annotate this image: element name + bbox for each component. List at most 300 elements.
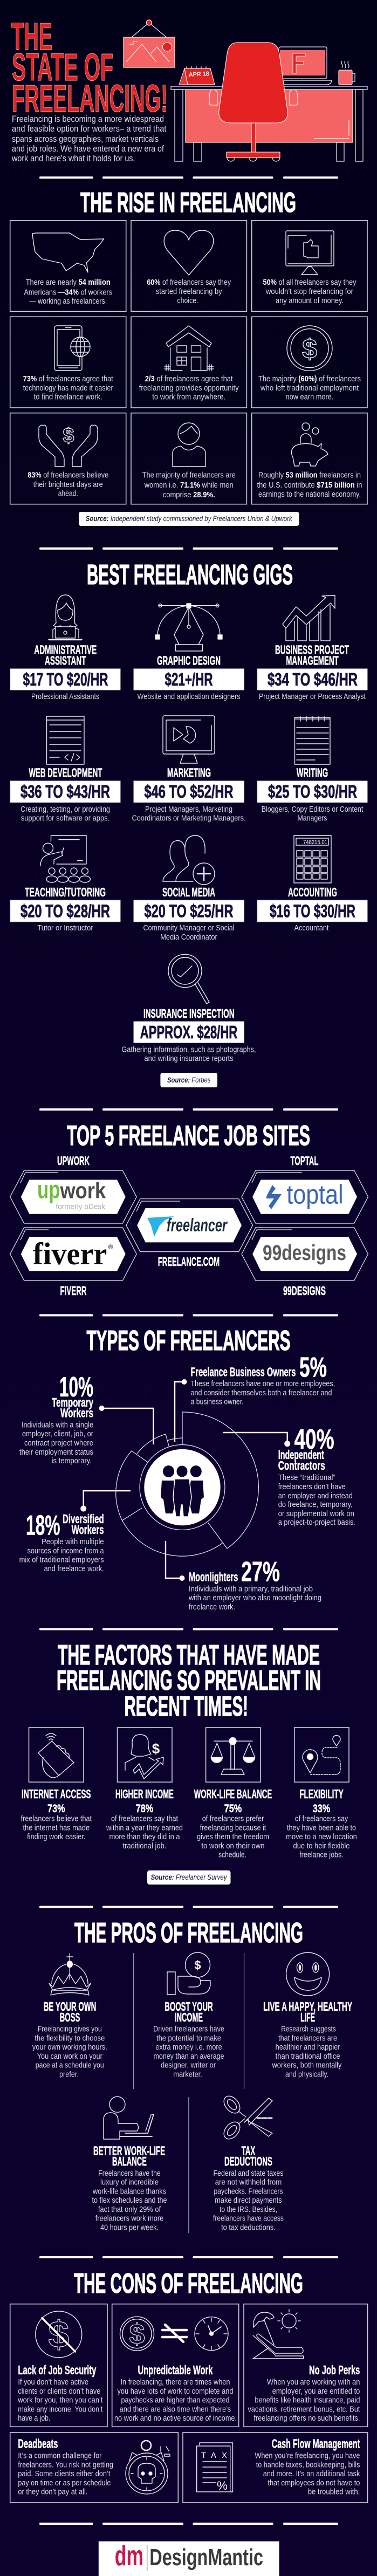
icon: money not equal time: $ bbox=[129, 2319, 145, 2350]
factor: internet access: freelancers believe that bbox=[21, 1815, 92, 1824]
stat card: 60% by choice: started freelancing by bbox=[156, 287, 222, 296]
factor: flexibility: they have been able to bbox=[287, 1824, 356, 1833]
icon: hand with coin: $ bbox=[194, 1958, 201, 1972]
intro paragraph bbox=[11, 114, 167, 163]
heading: RECENT TIMES! bbox=[124, 1691, 248, 1722]
type: diversified workers: and freelance work. bbox=[44, 1565, 104, 1573]
source note bbox=[147, 1871, 231, 1886]
pro: tax deductions: freelancers have access bbox=[213, 2215, 284, 2223]
icon: people with plus bbox=[163, 835, 215, 885]
source note bbox=[79, 512, 299, 527]
pro: better work-life balance bbox=[92, 2097, 167, 2232]
con: lack of job security: make any income. You don’t bbox=[18, 2406, 102, 2414]
factor: work-life balance: freelancing because it bbox=[200, 1824, 266, 1833]
intro paragraph: and feasible option for workers– a trend that bbox=[12, 124, 167, 134]
con: cash flow management bbox=[183, 2433, 368, 2503]
gig: business project management: MANAGEMENT bbox=[286, 654, 339, 668]
con: lack of job security: If you don’t have active bbox=[18, 2378, 88, 2387]
stat card: 83% brightest days bbox=[10, 413, 126, 504]
source note: Source: Independent study commissioned by Freelancers Union & Upwork bbox=[86, 514, 293, 523]
icon: dollar coin bbox=[287, 326, 332, 371]
con: cash flow management: to handle taxes, bookkeeping, bills bbox=[256, 2461, 360, 2469]
site: freelancer: FREELANCE.COM bbox=[158, 1255, 220, 1269]
pro: boost your income: marketer. bbox=[173, 2070, 202, 2079]
stat card: 54 million bbox=[10, 221, 126, 311]
stat card: 54 million: There are nearly 54 million bbox=[26, 278, 111, 287]
rate box: $36 TO $43/HR bbox=[20, 782, 110, 802]
gig: insurance inspection bbox=[122, 954, 256, 1063]
icon: tax document bbox=[197, 2443, 233, 2492]
rate box: $20 TO $28/HR bbox=[20, 902, 110, 922]
type: moonlighters: Moonlighters bbox=[189, 1570, 238, 1584]
gig: administrative assistant bbox=[10, 595, 120, 701]
connector lines bbox=[80, 1379, 290, 1581]
gig: business project management bbox=[257, 595, 367, 701]
intro paragraph: and job roles. We have entered a new era of bbox=[12, 143, 164, 154]
pro: live a happy healthy life: and physically. bbox=[285, 2070, 328, 2079]
gig: teaching: TEACHING/TUTORING bbox=[25, 885, 106, 899]
factor: higher income: of freelancers say that bbox=[111, 1815, 178, 1824]
rate box: $17 TO $20/HR bbox=[23, 670, 108, 690]
gig: web development: Creating, testing, or providing bbox=[20, 805, 110, 814]
gig: administrative assistant: Professional Assistants bbox=[31, 693, 99, 701]
icon: person at laptop bbox=[104, 2097, 154, 2139]
site: fiverr: FIVERR bbox=[60, 1284, 87, 1298]
con: lack of job security bbox=[10, 2304, 107, 2427]
site: fiverr bbox=[10, 1228, 136, 1298]
stat card: 60% earn more: who left traditional employment bbox=[260, 384, 359, 393]
pro: tax deductions: make direct payments bbox=[215, 2196, 282, 2205]
stat card: 50% wouldn't stop bbox=[252, 221, 367, 311]
stat card: 53 million contribute: earnings to the national economy. bbox=[258, 490, 361, 499]
rate box: $21+/HR bbox=[165, 670, 213, 690]
type: freelance business owners: These freelancers have one or more employees, bbox=[191, 1380, 335, 1388]
icon: magnifying glass bbox=[168, 954, 209, 1004]
icon: smiley face bbox=[286, 1952, 330, 1996]
icon: hand with coin bbox=[167, 1952, 210, 1995]
icon: calculator bbox=[294, 835, 331, 883]
site: fiverr: fiverr bbox=[33, 1236, 107, 1271]
stat card: 54 million: Americans —34% of workers bbox=[24, 288, 112, 297]
pro: tax deductions: paychecks. Freelancers bbox=[214, 2188, 283, 2196]
pro: boost your income: the potential to make bbox=[156, 2034, 221, 2043]
type: temporary workers: employer, client, job, or bbox=[22, 1430, 93, 1438]
rate box bbox=[134, 781, 244, 803]
con: cash flow management: and more. It’s an additional task bbox=[263, 2470, 360, 2478]
intro paragraph: work and here's what it holds for us. bbox=[11, 153, 135, 163]
gig: graphic design: GRAPHIC DESIGN bbox=[157, 654, 221, 668]
factor: flexibility: of freelancers say bbox=[295, 1815, 348, 1824]
stat card: women majority: comprise 28.9%. bbox=[163, 491, 215, 499]
con: no job perks: freelancing offers no such benefits. bbox=[253, 2414, 360, 2423]
pro: tax deductions: TAX bbox=[242, 2144, 256, 2158]
type: temporary workers: Temporary bbox=[52, 1395, 93, 1409]
gig: administrative assistant: ASSISTANT bbox=[45, 654, 86, 668]
site: toptal bbox=[242, 1154, 368, 1223]
gig: administrative assistant: ADMINISTRATIVE bbox=[34, 643, 97, 657]
type: moonlighters bbox=[188, 1557, 321, 1612]
type: independent contractors: Contractors bbox=[278, 1458, 325, 1472]
rate box bbox=[10, 900, 120, 922]
stat card: 54 million: — working as freelancers. bbox=[29, 297, 107, 306]
factor: internet access: INTERNET ACCESS bbox=[22, 1787, 91, 1801]
pro: tax deductions: DEDUCTIONS bbox=[224, 2154, 272, 2168]
stat card: 53 million contribute: Roughly 53 million freelancers in bbox=[258, 471, 361, 480]
stat card: 53 million contribute: the U.S. contribute $715 billion in bbox=[257, 481, 362, 490]
pro: better work-life balance: Freelancers have the bbox=[98, 2169, 161, 2178]
type: diversified workers: People with multiple bbox=[42, 1538, 104, 1546]
con: lack of job security: have a job. bbox=[18, 2414, 50, 2423]
site: upwork: work bbox=[60, 1178, 106, 1203]
type: diversified workers: sources of income from a bbox=[28, 1547, 104, 1556]
type: independent contractors: do freelance, temporary, bbox=[278, 1501, 353, 1509]
pro: live a happy healthy life: that freelancers are bbox=[278, 2034, 337, 2043]
factor: flexibility: FLEXIBILITY bbox=[299, 1787, 344, 1801]
stat card: women majority: women i.e. 71.1% while men bbox=[144, 481, 234, 490]
factor: higher income: within a year they earned bbox=[106, 1824, 183, 1833]
con: deadbeats: paid. Some clients either don’t bbox=[18, 2470, 110, 2478]
icon: growth chart bbox=[283, 595, 335, 641]
pro: live a happy healthy life: than traditional office bbox=[276, 2052, 340, 2061]
con: no job perks: When you are working with an bbox=[267, 2378, 360, 2387]
gig: writing bbox=[257, 716, 367, 823]
pro: tax deductions: are not withheld from bbox=[215, 2178, 282, 2187]
factor: flexibility: 33% bbox=[313, 1803, 331, 1815]
stat card: 50% wouldn't stop: wouldn’t stop freelancing for bbox=[265, 287, 353, 296]
gig: accounting: ACCOUNTING bbox=[288, 885, 337, 899]
site: freelancer: freelancer bbox=[167, 1215, 228, 1236]
type: moonlighters: with an employer who also moonlight doing bbox=[188, 1594, 321, 1602]
rate box: $46 TO $52/HR bbox=[145, 782, 233, 802]
pro: be your own boss: prefer. bbox=[59, 2070, 79, 2079]
icon: beach chair and umbrella bbox=[253, 2310, 304, 2359]
pro: live a happy healthy life bbox=[263, 1952, 352, 2079]
pro: boost your income: BOOST YOUR bbox=[164, 1999, 213, 2013]
pro: boost your income: extra money i.e. more bbox=[155, 2043, 222, 2052]
type: freelance business owners: 5% bbox=[299, 1352, 327, 1383]
con: deadbeats: It’s a common challenge for bbox=[18, 2452, 102, 2461]
con: unpredictable work: In freelancing, there are times when bbox=[121, 2378, 230, 2387]
title bbox=[11, 16, 168, 120]
stat card: 60% earn more: The majority (60%) of freelancers bbox=[258, 375, 361, 383]
factor: work-life balance bbox=[194, 1728, 272, 1860]
icon: notepad bbox=[294, 716, 330, 764]
type: independent contractors: a project-to-project basis. bbox=[278, 1518, 355, 1527]
desk bbox=[171, 86, 367, 161]
donut chart: freelancer types bbox=[116, 1412, 258, 1556]
stat card: 73% technology: 73% of freelancers agree that bbox=[23, 375, 113, 383]
icon: phone with globe bbox=[54, 326, 90, 371]
illustration: freelancer desk bbox=[124, 20, 367, 161]
icon: hand holding phone bbox=[38, 1734, 74, 1778]
pro: tax deductions: to tax deductions. bbox=[221, 2223, 276, 2232]
icon: pen tool bbox=[155, 604, 222, 651]
stat card: 73% technology: to find freelance work. bbox=[34, 393, 102, 402]
factor: higher income: HIGHER INCOME bbox=[115, 1787, 174, 1801]
con: deadbeats bbox=[10, 2433, 178, 2503]
stat card: 53 million contribute bbox=[252, 413, 367, 504]
icon: scissors bbox=[221, 2093, 272, 2142]
gig: marketing: Coordinators or Marketing Managers. bbox=[132, 814, 246, 823]
site: freelancer bbox=[126, 1199, 252, 1269]
gig: accounting: Accountant bbox=[294, 924, 329, 933]
factor: higher income bbox=[106, 1728, 183, 1851]
type: independent contractors: or supplemental work on bbox=[278, 1510, 354, 1518]
gig: social media: Media Coordinator bbox=[160, 933, 217, 942]
gig: web development bbox=[10, 716, 120, 823]
factor: flexibility: freelance jobs. bbox=[299, 1851, 344, 1860]
pro: boost your income: money than an average bbox=[153, 2052, 224, 2061]
pro: be your own boss: the flexibility to choose bbox=[35, 2034, 105, 2043]
icon: hands holding dollar: $ bbox=[63, 424, 74, 447]
site: fiverr: ® bbox=[108, 1243, 113, 1251]
icon: location route bbox=[303, 1735, 340, 1775]
site: upwork bbox=[10, 1154, 136, 1223]
section: cons of freelancing bbox=[10, 2268, 368, 2503]
factor: internet access bbox=[21, 1728, 92, 1841]
hanging picture bbox=[124, 20, 175, 67]
icon: woman with rising income: $ bbox=[152, 1741, 160, 1757]
gig: web development: WEB DEVELOPMENT bbox=[29, 766, 102, 780]
stat card: women majority: The majority of freelancers are bbox=[142, 471, 236, 480]
icon: crossed-out dollar: $ bbox=[48, 2313, 69, 2355]
type: freelance business owners: Freelance Business Owners bbox=[191, 1365, 296, 1379]
footer logo: DesignMantic: DesignMantic bbox=[149, 2544, 263, 2571]
stat card: 50% wouldn't stop: any amount of money. bbox=[276, 297, 344, 305]
icon: woman at laptop bbox=[49, 595, 82, 640]
gig: insurance inspection: INSURANCE INSPECTION bbox=[143, 1006, 235, 1020]
pro: better work-life balance: BETTER WORK-LIFE bbox=[93, 2144, 165, 2158]
pro: tax deductions bbox=[213, 2093, 284, 2232]
gig: teaching: Tutor or Instructor bbox=[37, 924, 93, 933]
type: diversified workers: Diversified bbox=[63, 1512, 104, 1526]
con: unpredictable work: no work and no active source of income. bbox=[114, 2414, 237, 2423]
pro: be your own boss: BOSS bbox=[60, 2010, 80, 2024]
icon: monitor with thumbs up bbox=[286, 231, 334, 275]
type: independent contractors bbox=[278, 1424, 355, 1527]
type: temporary workers: Individuals with a single bbox=[22, 1421, 93, 1430]
icon: code page bbox=[46, 716, 84, 764]
intro paragraph: Freelancing is becoming a more widespread bbox=[12, 114, 164, 124]
source note bbox=[160, 1073, 217, 1088]
section: pros of freelancing bbox=[32, 1917, 352, 2233]
type: freelance business owners: and consider themselves both a freelancer and bbox=[191, 1389, 332, 1397]
type: temporary workers: their employment status bbox=[19, 1448, 93, 1457]
con: no job perks: benefits like health insurance, paid bbox=[255, 2396, 360, 2405]
factor: work-life balance: of freelancers prefer bbox=[202, 1815, 264, 1824]
type: diversified workers bbox=[19, 1510, 104, 1573]
type: temporary workers bbox=[19, 1372, 93, 1465]
rate box bbox=[134, 1022, 244, 1043]
type: diversified workers: mix of traditional employers bbox=[19, 1556, 104, 1564]
type: temporary workers: contract project where bbox=[24, 1439, 93, 1448]
icon: money not equal time bbox=[120, 2317, 228, 2351]
con: unpredictable work: you have lots of work to complete and bbox=[118, 2387, 233, 2396]
stat card: 83% brightest days: ahead. bbox=[58, 490, 78, 498]
type: moonlighters: Individuals with a primary, traditional job bbox=[189, 1585, 313, 1594]
con: deadbeats: or they don’t pay at all. bbox=[18, 2488, 87, 2497]
gig: insurance inspection: and writing insurance reports bbox=[145, 1054, 233, 1063]
stat card: 73% technology: technology has made it easier bbox=[23, 384, 113, 393]
con: unpredictable work: and there are also time when there’s bbox=[120, 2406, 231, 2414]
pro: live a happy healthy life: workers, both mentally bbox=[272, 2061, 342, 2070]
pro: boost your income: designer, writer or bbox=[161, 2061, 216, 2070]
icon: woman with rising income bbox=[125, 1735, 163, 1779]
site: upwork: formerly oDesk bbox=[56, 1202, 106, 1211]
pro: be your own boss: your own working hours. bbox=[32, 2043, 107, 2052]
icon: three people bbox=[161, 1465, 204, 1517]
factor: flexibility: due to heir flexible bbox=[293, 1842, 349, 1851]
calendar: APR 18 bbox=[189, 71, 209, 78]
section: best freelancing gigs bbox=[10, 559, 367, 1088]
stat card: 83% brightest days: 83% of freelancers believe bbox=[28, 471, 108, 480]
pro: live a happy healthy life: Research suggests bbox=[281, 2025, 336, 2034]
icon: piggy bank bbox=[291, 423, 328, 466]
icon: woman bbox=[173, 423, 205, 467]
factor: work-life balance: 75% bbox=[224, 1803, 242, 1815]
factor: internet access: 73% bbox=[47, 1803, 65, 1815]
footer logo: DesignMantic bbox=[99, 2540, 279, 2576]
stat card: 60% by choice: 60% of freelancers say they bbox=[147, 278, 231, 287]
factor: work-life balance: schedule. bbox=[218, 1851, 246, 1860]
source note: Source: Forbes bbox=[167, 1075, 210, 1084]
type: temporary workers: is temporary. bbox=[52, 1457, 92, 1465]
rate box: $20 TO $25/HR bbox=[145, 902, 233, 922]
icon: hands holding dollar bbox=[39, 424, 98, 467]
con: cash flow management: be troubled with. bbox=[308, 2488, 360, 2497]
pro: boost your income bbox=[153, 1952, 224, 2079]
site: 99designs: 99designs bbox=[263, 1241, 346, 1265]
icon: skull stopwatch bbox=[126, 2441, 170, 2494]
site: 99designs bbox=[242, 1228, 368, 1298]
stat card: 60% earn more bbox=[252, 317, 367, 408]
factor: higher income: traditional job. bbox=[123, 1842, 166, 1851]
pro: be your own boss: Freelancing gives you bbox=[38, 2025, 102, 2034]
stat card: 60% by choice bbox=[131, 221, 246, 311]
type: independent contractors: freelancers don’t have bbox=[278, 1483, 346, 1491]
stat card: 2/3 anywhere bbox=[131, 317, 246, 408]
stat card: 2/3 anywhere: to work from anywhere. bbox=[152, 393, 225, 402]
source note: Source: Freelancer Survey bbox=[151, 1873, 227, 1881]
rate box bbox=[134, 669, 244, 690]
gig: accounting bbox=[257, 835, 367, 933]
factor: flexibility: move to a new location bbox=[286, 1833, 357, 1841]
type: independent contractors: 40% bbox=[294, 1424, 334, 1455]
icon: teacher and students bbox=[40, 835, 90, 882]
icon: balance scale bbox=[211, 1738, 255, 1775]
site: 99designs: 99DESIGNS bbox=[283, 1284, 326, 1298]
con: deadbeats: freelancers. You risk not getting bbox=[18, 2461, 113, 2469]
gig: web development: support for software or apps. bbox=[21, 814, 109, 823]
pro: better work-life balance: to flex schedules and the bbox=[92, 2196, 167, 2205]
office chair bbox=[209, 43, 298, 161]
type: freelance business owners bbox=[191, 1352, 335, 1407]
pro: better work-life balance: 40 hours per week. bbox=[100, 2223, 159, 2232]
factor: higher income: more than they did in a bbox=[109, 1833, 180, 1841]
heading bbox=[57, 1640, 321, 1722]
icon: crossed-out dollar bbox=[36, 2311, 82, 2358]
icon: tax document: % bbox=[217, 2479, 228, 2492]
site: upwork: up bbox=[37, 1176, 60, 1204]
con: no job perks bbox=[244, 2304, 368, 2427]
factor: work-life balance: gives them the freedom bbox=[197, 1833, 269, 1841]
con: unpredictable work bbox=[112, 2304, 239, 2427]
section: factors bbox=[21, 1640, 357, 1886]
icon: crown bbox=[49, 1954, 91, 1995]
gig: graphic design bbox=[134, 604, 244, 701]
con: no job perks: employer, you are entitled to bbox=[272, 2387, 360, 2396]
gig: marketing bbox=[132, 716, 246, 823]
gig: social media: Community Manager or Social bbox=[143, 924, 234, 933]
type: freelance business owners: a business owner. bbox=[191, 1398, 244, 1407]
rate box: APPROX. $28/HR bbox=[140, 1023, 237, 1043]
coffee mug bbox=[339, 61, 355, 85]
factor: internet access: the internet has made bbox=[23, 1824, 90, 1833]
type: independent contractors: Independent bbox=[278, 1448, 324, 1462]
pro: boost your income: Driven freelancers have bbox=[153, 2025, 224, 2034]
stat card: 73% technology bbox=[10, 317, 126, 408]
calendar bbox=[179, 66, 215, 85]
stat card: 83% brightest days: their brightest days are bbox=[33, 481, 103, 489]
gig: writing: WRITING bbox=[297, 766, 328, 780]
gig: marketing: Project Managers, Marketing bbox=[145, 805, 232, 814]
type: independent contractors: an employer and instead bbox=[278, 1492, 353, 1501]
gig: social media bbox=[134, 835, 244, 942]
stat card: 50% wouldn't stop: 50% of all freelancers say they bbox=[263, 278, 357, 287]
title: FREELANCING! bbox=[12, 78, 168, 120]
stat card: 60% by choice: choice. bbox=[177, 297, 198, 305]
gig: social media: SOCIAL MEDIA bbox=[162, 885, 215, 899]
site: upwork: UPWORK bbox=[57, 1154, 90, 1168]
type: diversified workers: 18% bbox=[26, 1510, 60, 1542]
con: unpredictable work: paychecks are higher than expected bbox=[121, 2396, 230, 2405]
con: cash flow management: When you’re freelancing, you have bbox=[255, 2452, 360, 2461]
rate box bbox=[134, 900, 244, 922]
title: STATE OF bbox=[12, 46, 113, 89]
pro: tax deductions: Federal and state taxes bbox=[214, 2169, 284, 2178]
factor: flexibility bbox=[286, 1728, 357, 1860]
pro: better work-life balance: freelancers work more bbox=[95, 2215, 163, 2223]
gig: insurance inspection: Gathering information, such as photographs, bbox=[122, 1046, 256, 1054]
laptop bbox=[279, 47, 332, 85]
pro: better work-life balance: fact that only 29% of bbox=[98, 2205, 161, 2214]
gig: teaching bbox=[10, 835, 120, 933]
stat card: 2/3 anywhere: freelancing provides opportunity bbox=[139, 384, 239, 393]
pro: live a happy healthy life: healthier and happier bbox=[276, 2043, 340, 2052]
gig: marketing: MARKETING bbox=[167, 766, 211, 780]
type: temporary workers: Workers bbox=[60, 1406, 93, 1420]
intro paragraph: spans across geographies, market verticals bbox=[12, 134, 159, 144]
section: types of freelancers bbox=[19, 1325, 355, 1612]
title: THE bbox=[11, 16, 52, 58]
pro: be your own boss: You can work on your bbox=[37, 2052, 102, 2061]
factor: work-life balance: to work on their own bbox=[202, 1842, 264, 1851]
icon: tax document: TAX bbox=[201, 2451, 227, 2460]
pro: better work-life balance: work-life balance thanks bbox=[92, 2188, 166, 2196]
con: lack of job security: clients or clients don’t have bbox=[18, 2387, 100, 2396]
pro: better work-life balance: BALANCE bbox=[112, 2154, 147, 2168]
icon: monitor with chart bbox=[163, 716, 215, 763]
stat card: 2/3 anywhere: 2/3 of freelancers agree that bbox=[145, 375, 233, 383]
icon: heart bbox=[164, 230, 214, 275]
pro: be your own boss: BE YOUR OWN bbox=[44, 1999, 96, 2013]
factor: higher income: 78% bbox=[136, 1803, 154, 1815]
type: moonlighters: freelance work. bbox=[189, 1603, 235, 1612]
type: moonlighters: 27% bbox=[241, 1557, 280, 1588]
icon: dollar coin: $ bbox=[302, 334, 317, 364]
gig: graphic design: Website and application designers bbox=[137, 693, 241, 701]
type: independent contractors: These “traditional” bbox=[278, 1474, 335, 1482]
